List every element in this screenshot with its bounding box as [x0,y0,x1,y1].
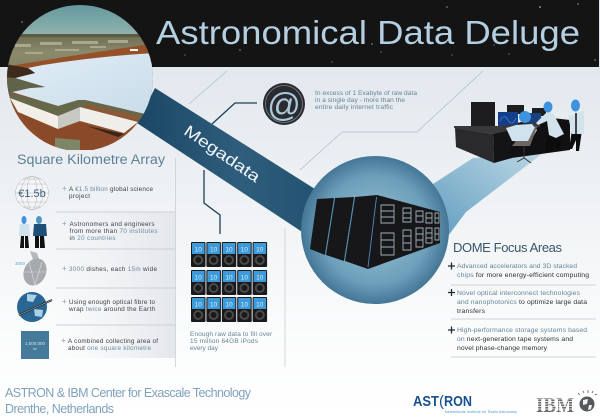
iPod row 3: 10 [241,302,248,308]
connector: navy data line [204,103,257,234]
icon: one square kilometre: m² [33,347,38,351]
row: staff text [62,219,158,242]
panel: square kilometre array [15,152,175,359]
logo: IBM with globe [535,390,597,417]
standing person two [568,100,584,151]
illustration: control room desk and staff [454,100,584,163]
iPod row 3: 10 [210,302,218,308]
row: staff text: + [62,219,67,228]
focus item 3: novel phase-change memory [457,345,548,352]
focus item 3 [448,326,587,352]
title: Astronomical Data Deluge [156,14,580,51]
row: dishes text: + [62,264,67,273]
iPod row 1: 10 [210,246,218,254]
icon: globe 1.5b [16,176,48,210]
photo: square kilometre array field [7,5,153,150]
iPod row 1: 10 [195,246,202,254]
seated person [506,111,537,163]
exabyte text: in a single day - more than the [315,97,405,104]
iPod row 1: 10 [256,246,264,254]
footer location text [5,386,252,416]
row: fibre text: Using enough optical fibre to [69,299,155,306]
row: fibre text: wrap twice around the Earth [68,306,155,313]
server sphere [301,156,449,304]
focus item 2 [448,289,587,315]
row: staff text: Astronomers and engineers [70,221,154,228]
focus item 1: chips for more energy-efficient computing [457,272,589,279]
iPod caption: 15 million 64GB iPods [190,338,259,345]
logo: IBM with globe: IBM [536,393,574,417]
header band with starfield [0,0,599,67]
row: area text: about one square kilometre [68,345,151,352]
panel: DOME focus areas [448,240,596,357]
light beam to control desk [430,153,543,240]
icon: two engineers [19,216,47,248]
iPod row 1: 10 [241,246,248,254]
focus item 1 [448,262,589,279]
row: fibre text: + [62,297,67,306]
iPod row 2: 10 [241,274,248,282]
icon: radio dish: 3000 [15,261,26,266]
iPod row 3: 10 [195,302,202,308]
icon: one square kilometre [21,331,49,359]
iPod row 2: 10 [210,274,218,282]
row: budget text: + [62,184,67,193]
iPod caption: Enough raw data to fill over [190,331,273,338]
exabyte text: entire daily internet traffic [315,104,394,111]
icon: globe 1.5b: €1.5b [18,188,46,200]
icon: radio dish [15,251,51,289]
band label: Megadata [180,123,263,186]
row: area text: + [61,336,66,345]
exabyte text: In excess of 1 Exabyte of raw data [315,90,417,97]
icon: earth wrapped in fibre [17,292,52,322]
SKA heading: Square Kilometre Array [17,152,165,167]
standing person with coat [536,102,564,152]
row: dishes text: 3000 dishes, each 15m wide [69,266,157,273]
decorative circuit lines [189,71,483,170]
iPod row 2: 10 [225,274,233,282]
iPod row 2 [191,270,267,295]
logo: ASTRON: RON [444,393,472,410]
row: fibre text [62,297,155,313]
row: budget text: A €1.5 billion global science [69,186,153,193]
focus item 3: High-performance storage systems based [457,327,587,334]
iPod row 3: 10 [256,302,264,308]
icon: at sign badge: @ [267,86,301,123]
iPod row 2: 10 [195,274,202,282]
icon: one square kilometre: 1,000,000 [25,341,46,346]
iPod caption: every day [190,345,219,352]
focus item 2: transfers [457,308,486,315]
logo: ASTRON: AST [413,393,439,410]
iPod row 1 [191,242,267,267]
row backgrounds [56,212,175,358]
iPod row 2: 10 [256,274,264,282]
iPod grid [191,242,267,322]
focus item 3: on next-generation tape systems and [457,336,573,343]
row: budget text [62,184,153,200]
iPod caption [190,331,273,352]
DOME heading: DOME Focus Areas [453,240,562,255]
row: budget text: project [69,193,90,200]
exabyte text [315,90,417,111]
focus item 2: Novel optical interconnect technologies [457,290,581,297]
footer location text: ASTRON & IBM Center for Exascale Technology [5,386,252,400]
server racks: blue edge lights [326,197,376,267]
Megadata band [137,88,345,245]
row: area text: A combined collecting area of [68,338,158,345]
logo: ASTRON: ( [439,393,444,410]
logo: ASTRON [413,393,517,414]
row: area text [61,336,158,352]
iPod row 3: 10 [225,302,233,308]
logo: ASTRON: Netherlands Institute for Radio Astronomy [445,410,517,414]
footer location text: Drenthe, Netherlands [5,402,114,416]
server racks: front slabs [310,195,440,269]
iPod row 1: 10 [225,246,233,254]
server racks: side units [381,205,439,255]
row: staff text: in 20 countries [70,235,116,242]
focus item 2: and nanophotonics to optimize large data [457,299,587,306]
panel rules [176,158,285,367]
focus item 1: Advanced accelerators and 3D stacked [457,263,577,270]
row: staff text: from more than 70 institutes [70,228,158,235]
iPod row 3 [191,297,267,322]
